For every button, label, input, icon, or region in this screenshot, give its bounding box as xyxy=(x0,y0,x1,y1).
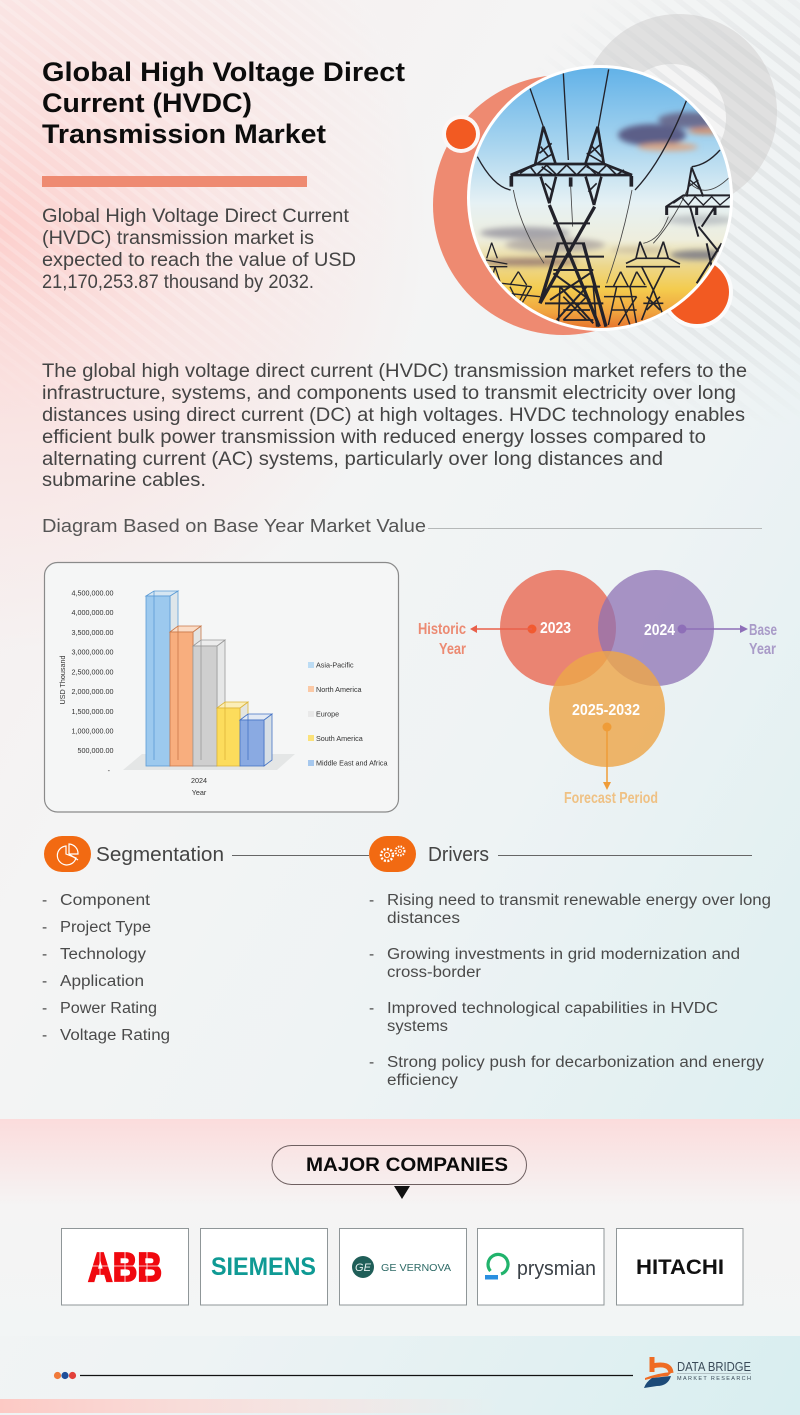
title: Current (HVDC) xyxy=(42,88,252,118)
logo: Hitachi: HITACHI xyxy=(636,1256,724,1279)
segmentation list: - xyxy=(42,1027,47,1044)
market description paragraph: alternating current (AC) systems, particularly over long distances and xyxy=(42,449,663,470)
market description paragraph: efficient bulk power transmission with reduced energy losses compared to xyxy=(42,427,706,448)
market size statement: 21,170,253.87 thousand by 2032. xyxy=(42,272,314,293)
y axis labels: - xyxy=(108,766,111,775)
diagram section heading: Diagram Based on Base Year Market Value xyxy=(42,516,426,536)
wires xyxy=(477,69,720,190)
3D bars xyxy=(146,591,272,766)
segmentation list: Project Type xyxy=(60,919,151,936)
y axis labels: 2,000,000.00 xyxy=(72,687,114,696)
chart legend: Europe xyxy=(316,710,339,718)
y axis labels: 1,000,000.00 xyxy=(72,726,114,736)
historic year callout: Historic xyxy=(418,621,466,638)
market description paragraph: infrastructure, systems, and components used to transmit electricity over long xyxy=(42,383,736,404)
segmentation list: - xyxy=(42,919,47,936)
x axis labels: 2024 xyxy=(191,776,207,785)
base year callout xyxy=(644,622,777,658)
chart legend: North America xyxy=(316,685,362,694)
market size statement xyxy=(42,206,356,293)
base year callout: Base xyxy=(749,622,777,639)
footer dots xyxy=(54,1372,76,1379)
market size statement: (HVDC) transmission market is xyxy=(42,228,314,249)
y axis title: USD Thousand xyxy=(58,655,67,705)
forecast period callout: 2025-2032 xyxy=(572,702,640,719)
title: Global High Voltage Direct xyxy=(42,57,405,87)
chart legend: Asia-Pacific xyxy=(316,660,354,670)
logo: Siemens xyxy=(200,1228,328,1305)
y axis labels xyxy=(72,588,114,775)
segmentation list: - xyxy=(42,1000,47,1017)
major companies heading pill: MAJOR COMPANIES xyxy=(306,1155,508,1176)
drivers list: distances xyxy=(387,910,460,927)
y axis labels: 3,000,000.00 xyxy=(72,648,114,656)
x axis labels xyxy=(191,776,207,797)
accent dot with white ring xyxy=(442,115,480,153)
y axis labels: 4,000,000.00 xyxy=(72,608,114,617)
drivers list: - xyxy=(369,946,374,963)
market description paragraph xyxy=(42,361,747,491)
logo: Hitachi xyxy=(616,1228,743,1305)
market description paragraph: distances using direct current (DC) at high voltages. HVDC technology enables xyxy=(42,405,745,426)
drivers list: Strong policy push for decarbonization and energy xyxy=(387,1054,764,1071)
icon: pie chart xyxy=(44,836,91,872)
logo: Data Bridge Market Research: MARKET RESEARCH xyxy=(677,1376,751,1382)
logo: ABB xyxy=(62,1228,188,1305)
chart legend: Middle East and Africa xyxy=(316,758,388,768)
logo: ABB: ABB xyxy=(88,1244,162,1290)
y axis labels: 1,500,000.00 xyxy=(72,707,114,716)
major companies heading pill xyxy=(272,1146,526,1199)
icon: gears xyxy=(369,836,416,872)
venn diagram: historic, base and forecast years xyxy=(418,570,777,807)
mid tower xyxy=(626,242,680,320)
drivers list: efficiency xyxy=(387,1072,458,1089)
historic year callout: 2023 xyxy=(540,620,571,637)
segmentation list: Technology xyxy=(60,946,146,963)
chart legend xyxy=(308,660,388,768)
logo: GE Vernova: GE xyxy=(355,1262,372,1274)
segmentation list: - xyxy=(42,946,47,963)
far towers xyxy=(486,243,540,307)
segmentation list: - xyxy=(42,892,47,909)
footer rule xyxy=(80,1374,633,1376)
segmentation list: - xyxy=(42,973,47,990)
panel: bar chart xyxy=(44,562,398,812)
drivers list: cross-border xyxy=(387,964,481,981)
drivers list: Improved technological capabilities in HVDC xyxy=(387,1000,718,1017)
segmentation heading xyxy=(44,836,369,872)
x axis labels: Year xyxy=(192,788,207,797)
bottom gradient strip xyxy=(0,1399,500,1413)
drivers list: Rising need to transmit renewable energy over long xyxy=(387,892,771,909)
segmentation list: Power Rating xyxy=(60,1000,157,1017)
title accent bar xyxy=(42,176,307,187)
drivers list xyxy=(369,892,771,1089)
drivers list: Growing investments in grid modernization and xyxy=(387,946,740,963)
forecast period callout: Forecast Period xyxy=(564,790,658,807)
drivers heading xyxy=(369,836,752,872)
logo: Prysmian xyxy=(478,1228,604,1305)
drivers list: systems xyxy=(387,1018,448,1035)
y axis labels: 500,000.00 xyxy=(78,746,114,755)
forecast period callout xyxy=(564,702,658,807)
market size statement: Global High Voltage Direct Current xyxy=(42,206,350,227)
logo: Data Bridge Market Research: DATA BRIDGE xyxy=(677,1359,751,1374)
market size statement: expected to reach the value of USD xyxy=(42,250,356,271)
y axis labels: 3,500,000.00 xyxy=(72,628,114,637)
logo: Prysmian: prysmian xyxy=(517,1258,596,1280)
y axis labels: 4,500,000.00 xyxy=(72,588,114,598)
segmentation list: Voltage Rating xyxy=(60,1027,170,1044)
segmentation heading: Segmentation xyxy=(96,844,224,866)
y axis labels: 2,500,000.00 xyxy=(72,668,114,676)
chart floor xyxy=(123,754,295,770)
segmentation list: Application xyxy=(60,973,144,990)
logo: GE Vernova: GE VERNOVA xyxy=(381,1262,451,1274)
drivers list: - xyxy=(369,892,374,909)
logo: Siemens: SIEMENS xyxy=(211,1253,316,1281)
title xyxy=(42,57,405,149)
base year callout: Year xyxy=(749,641,776,658)
right tower xyxy=(666,167,730,283)
logo: GE Vernova xyxy=(340,1228,466,1305)
segmentation list: Component xyxy=(60,892,151,909)
chart legend: South America xyxy=(316,734,363,743)
base year callout: 2024 xyxy=(644,622,675,639)
historic year callout xyxy=(418,620,571,658)
drivers list: - xyxy=(369,1000,374,1017)
main tower xyxy=(511,127,632,205)
historic year callout: Year xyxy=(439,641,466,658)
market description paragraph: submarine cables. xyxy=(42,470,206,491)
logo: Data Bridge Market Research xyxy=(644,1357,751,1388)
hero photo: transmission towers at sunset xyxy=(467,65,735,331)
panel: major companies band xyxy=(0,1119,800,1336)
drivers heading: Drivers xyxy=(428,844,489,866)
decorative circles behind the photo xyxy=(433,14,800,360)
market description paragraph: The global high voltage direct current (HVDC) transmission market refers to the xyxy=(42,361,747,382)
drivers list: - xyxy=(369,1054,374,1071)
segmentation list xyxy=(42,892,170,1044)
title: Transmission Market xyxy=(42,119,326,149)
